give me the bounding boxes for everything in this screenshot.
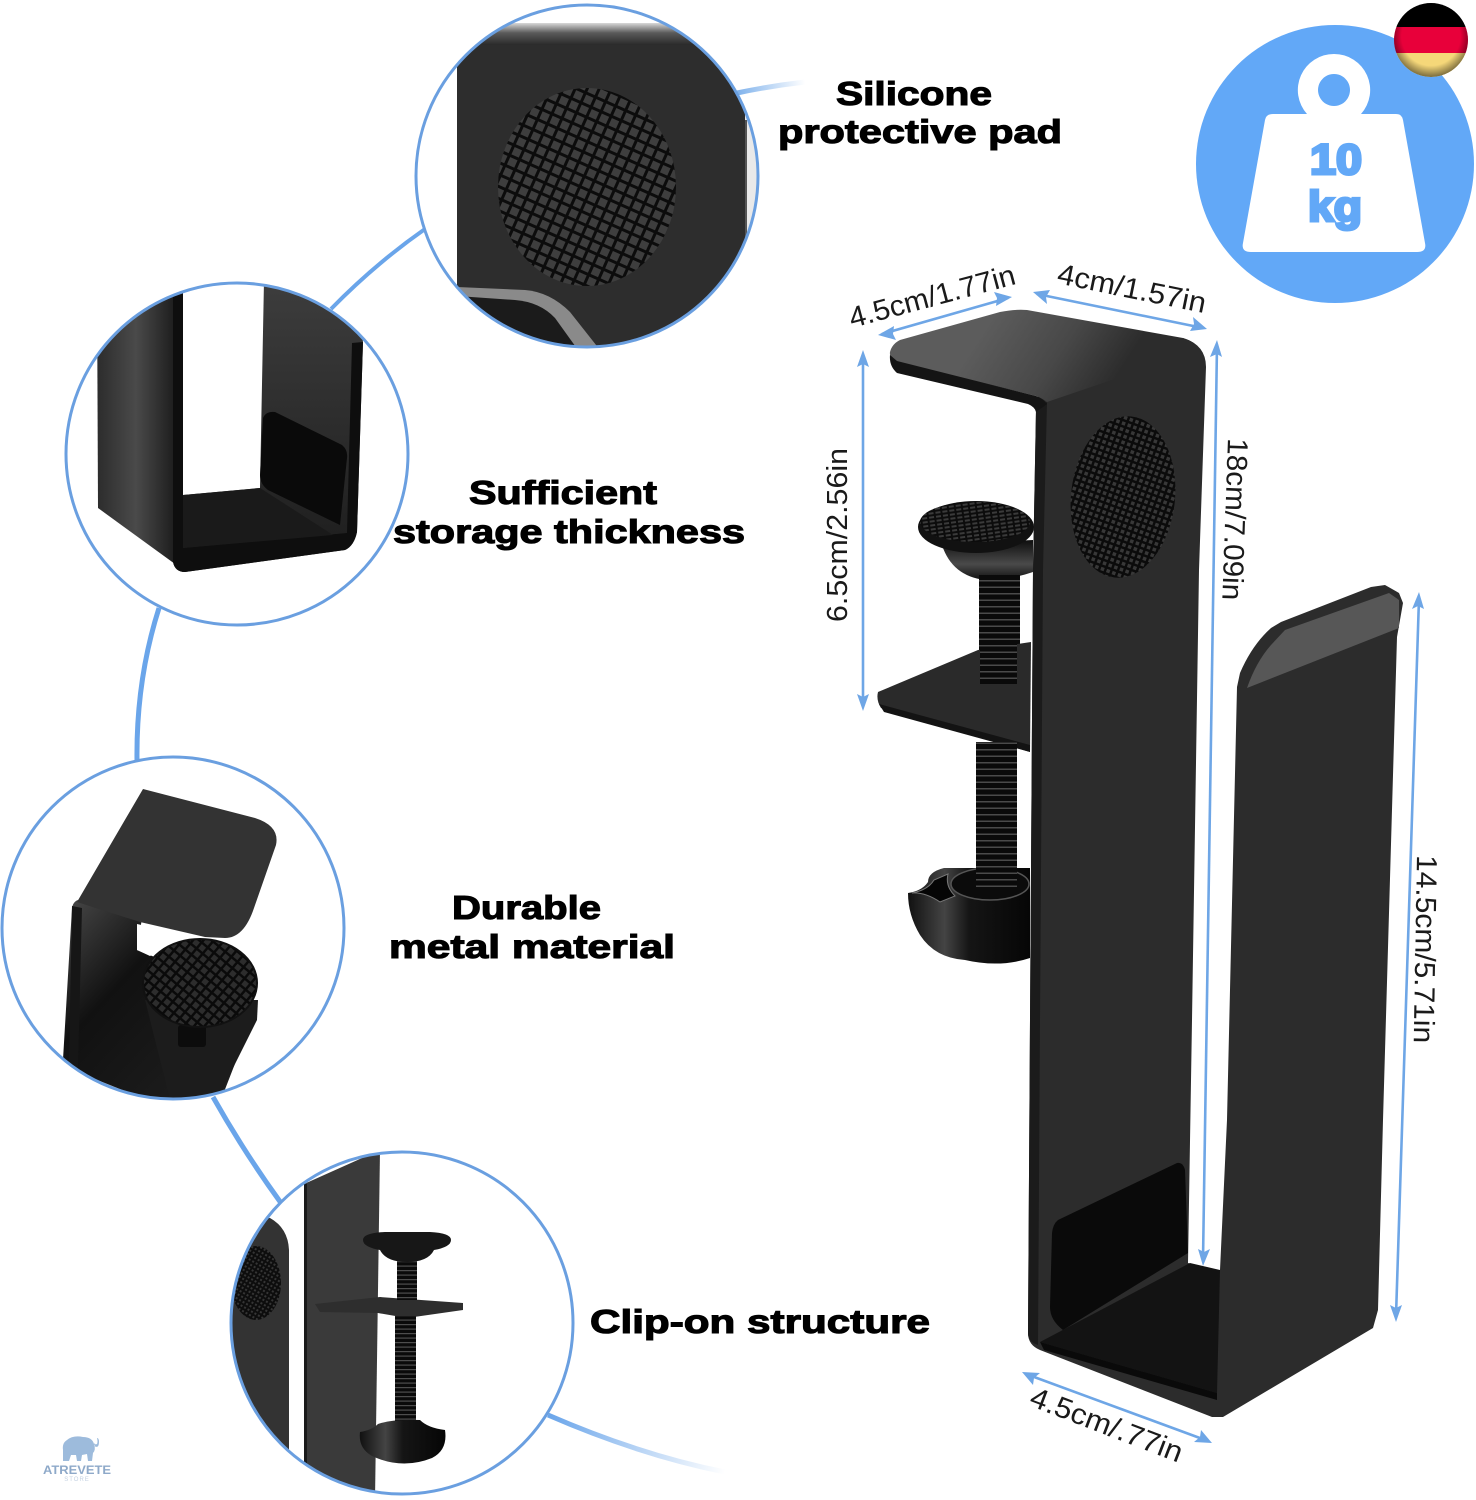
detail circle: durable metal	[60, 789, 277, 1110]
label: silicone protective pad: Silicone	[836, 75, 992, 112]
label: silicone protective pad	[778, 75, 1062, 150]
top flap	[77, 789, 277, 938]
label: durable metal material: Durable	[452, 889, 601, 926]
felt floor	[183, 488, 332, 542]
side body	[233, 1000, 258, 1068]
German flag badge	[1394, 3, 1468, 77]
felt wall	[1050, 1163, 1188, 1330]
dimension labels	[822, 259, 1442, 1469]
spine	[1028, 338, 1222, 1417]
middle plate	[877, 642, 1031, 752]
detail circle outline: clip-on structure	[231, 1152, 573, 1494]
lower knob	[360, 1420, 445, 1464]
icon: weight: kg	[1308, 183, 1362, 231]
upper clamp pad	[918, 501, 1034, 553]
label: clip-on structure: Clip-on structure	[590, 1303, 930, 1340]
dimension labels: 6.5cm/2.56in	[822, 448, 854, 622]
dimension labels: 4.5cm/.77in	[1025, 1382, 1187, 1469]
rubber disc on spine	[1063, 411, 1183, 583]
arrow: full height	[1198, 340, 1222, 1266]
bolt	[397, 1261, 417, 1300]
dimension labels: 4cm/1.57in	[1055, 259, 1209, 320]
arm top face	[1247, 593, 1399, 688]
label: sufficient storage thickness	[393, 474, 745, 550]
detail circle outline: storage thickness	[66, 283, 408, 625]
silicone pad texture	[498, 88, 676, 286]
dimension labels: 18cm/7.09in	[1215, 438, 1253, 601]
felt wall	[260, 412, 347, 525]
small plate	[315, 1297, 463, 1318]
rear arm	[1212, 585, 1403, 1417]
icon: weight	[1243, 54, 1425, 252]
rubber disc	[143, 939, 257, 1027]
dimension labels: 14.5cm/5.71in	[1407, 855, 1442, 1043]
arrow: arm height	[1390, 592, 1424, 1322]
top pad	[363, 1232, 451, 1262]
weight capacity badge	[1196, 25, 1474, 303]
main product: clamp hook	[877, 310, 1403, 1417]
arrow: clamp opening	[857, 350, 869, 711]
label: sufficient storage thickness: storage thickness	[393, 513, 745, 550]
dimension labels: 4.5cm/1.77in	[846, 260, 1019, 335]
logo: Atrevete Store	[43, 1436, 111, 1483]
stem	[178, 1025, 206, 1047]
arrow: top width right	[1033, 290, 1207, 331]
pad texture	[231, 1246, 281, 1320]
detail circle: silicone pad	[457, 23, 758, 353]
logo: Atrevete Store: STORE	[64, 1477, 90, 1483]
felt floor	[1040, 1263, 1220, 1393]
logo: Atrevete Store: ATREVETE	[43, 1465, 111, 1477]
cone under clamp pad	[942, 540, 1033, 580]
dimension arrows	[857, 290, 1424, 1443]
lower knob	[908, 868, 1030, 964]
detail circle outline: durable metal	[2, 757, 344, 1099]
upper screw	[979, 575, 1020, 685]
detail circle: storage thickness	[97, 280, 363, 572]
label: sufficient storage thickness: Sufficient	[469, 474, 657, 511]
detail circle: clip-on structure	[225, 1150, 463, 1500]
label: silicone protective pad: protective pad	[778, 113, 1062, 150]
lower screw	[976, 742, 1017, 887]
label: durable metal material	[389, 889, 675, 965]
top flap	[890, 310, 1200, 402]
icon: elephant	[63, 1436, 99, 1461]
arrow: top width left	[878, 292, 1012, 340]
connector lines between detail circles	[137, 82, 805, 1472]
arrow: base width	[1022, 1372, 1212, 1443]
label: durable metal material: metal material	[389, 928, 675, 965]
detail circle outline: silicone pad	[416, 5, 758, 347]
icon: weight: 10	[1310, 136, 1362, 184]
